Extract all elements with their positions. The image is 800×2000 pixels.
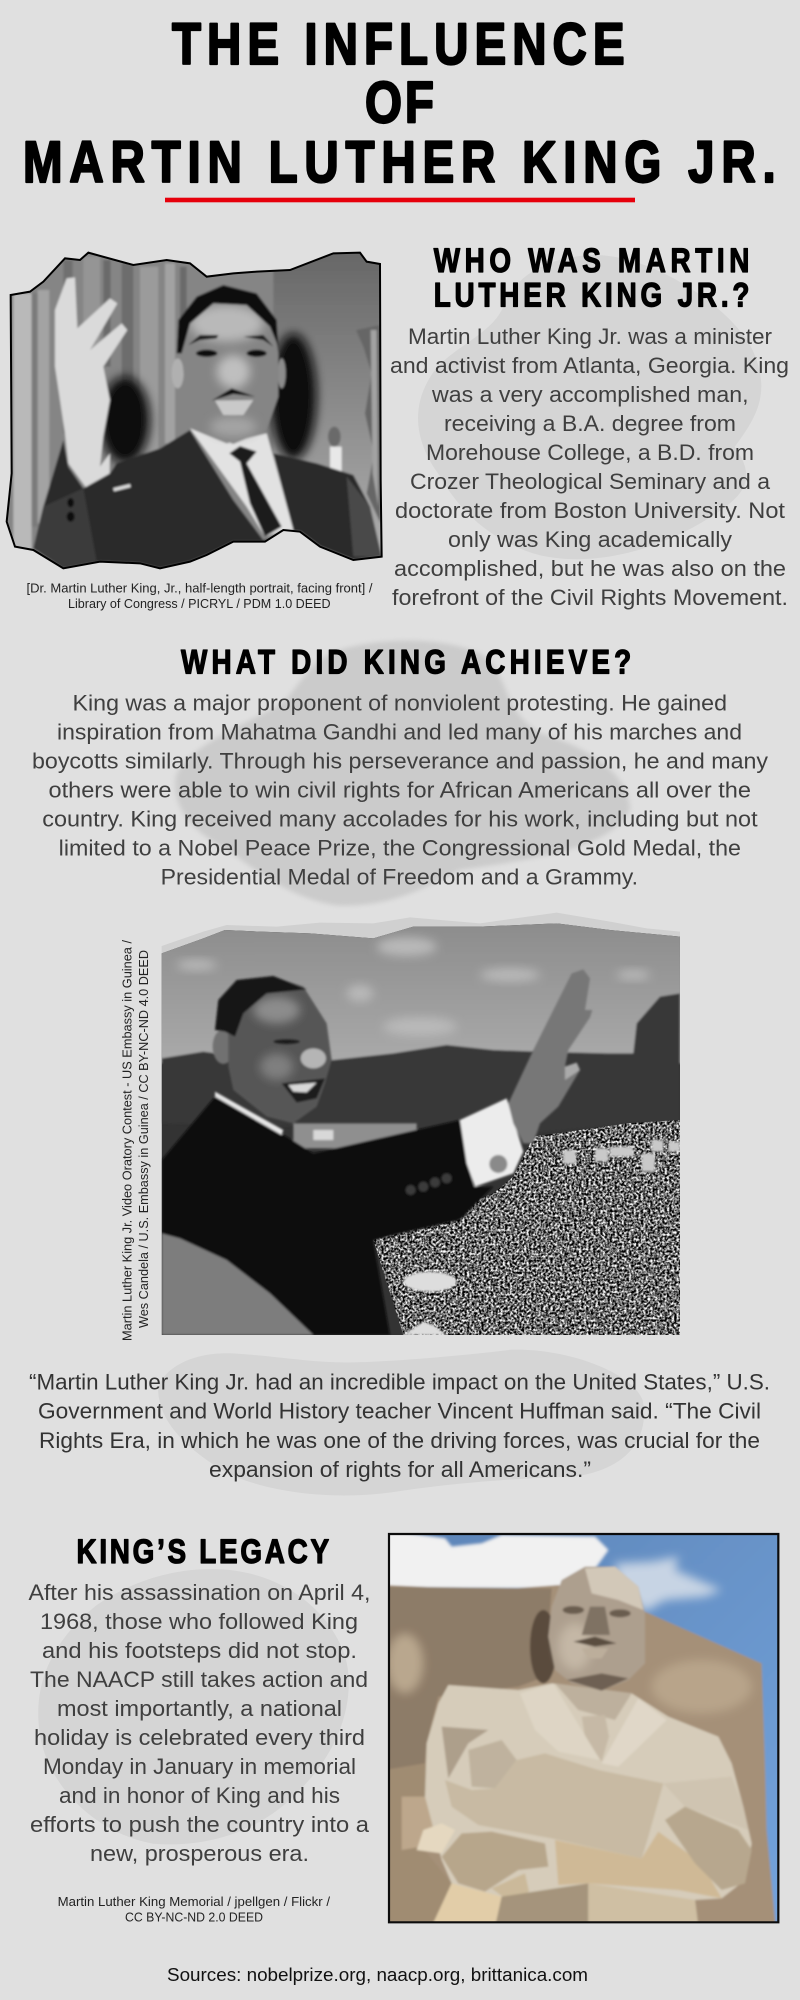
sleeve buttons [406, 1173, 452, 1195]
scroll [417, 1823, 455, 1853]
text block: who was: only was King academically [448, 527, 732, 552]
photo border [389, 1534, 778, 1922]
text block: who was: doctorate from Boston University. Not [395, 498, 785, 523]
foreground hat [162, 1233, 313, 1335]
text block: legacy: 1968, those who followed King [40, 1609, 358, 1634]
lower forearm [555, 1832, 722, 1898]
text block: who was: and activist from Atlanta, Georgia. King [390, 353, 789, 378]
photo caption: portrait: Library of Congress / PICRYL / PDM 1.0 DEED [68, 596, 331, 611]
text block: who was: was a very accomplished man, [431, 382, 748, 407]
cuff [460, 1098, 523, 1187]
text block: who was: forefront of the Civil Rights Movement. [392, 585, 788, 610]
text block: achievements: country. King received many accolades for his work, including but not [42, 807, 758, 832]
moustache and mouth [212, 388, 255, 401]
heading: what did King achieve: WHAT DID KING ACHIEVE? [181, 643, 631, 681]
brows and eyes [188, 335, 218, 345]
candle [330, 447, 342, 473]
distant signs [293, 1123, 417, 1148]
crossed forearm [445, 1753, 663, 1858]
suit [162, 1097, 493, 1335]
statue body [425, 1683, 752, 1927]
wall [273, 247, 383, 563]
raised hand [55, 277, 127, 488]
text block: legacy: holiday is celebrated every third [34, 1725, 365, 1750]
bedpost [356, 325, 381, 523]
far sleeve [663, 1777, 748, 1830]
text block: legacy: efforts to push the country into a [30, 1812, 370, 1837]
blob: behind who-was section [418, 255, 761, 559]
quote from Vincent Huffman: “Martin Luther King Jr. had an incredible impact on the United States,” U.S. [29, 1369, 770, 1394]
text block: who was [390, 324, 789, 610]
shirt cuff at bottom [403, 1322, 447, 1335]
text block: achievements: Presidential Medal of Freedom and a Grammy. [161, 865, 638, 890]
suit [33, 430, 382, 568]
tie [229, 446, 282, 537]
ear [212, 1031, 230, 1065]
crowd [373, 1120, 680, 1335]
text block: legacy: After his assassination on April 4, [28, 1580, 370, 1605]
text block: achievements: limited to a Nobel Peace Prize, the Congressional Gold Medal, the [59, 836, 741, 861]
text block: achievements: King was a major proponent of nonviolent protesting. He gained [72, 691, 727, 716]
shadow beside head [530, 1610, 557, 1683]
title: OF [365, 71, 434, 136]
text block: legacy: new, prosperous era. [90, 1841, 309, 1866]
photo caption: vertical: Wes Candela / U.S. Embassy in Guinea / CC BY-NC-ND 4.0 DEED [136, 950, 151, 1328]
text block: who was: Martin Luther King Jr. was a minister [408, 324, 772, 349]
title [23, 13, 776, 195]
ears [172, 358, 184, 388]
text block: achievements: boycotts similarly. Through his perseverance and passion, he and many [32, 749, 768, 774]
blob: behind legacy section [38, 1569, 349, 1844]
photo caption: memorial [58, 1894, 330, 1925]
heading: who was: WHO WAS MARTIN [434, 241, 749, 280]
curtain [0, 247, 277, 573]
quote from Vincent Huffman: Rights Era, in which he was one of the driving forces, was crucial for the [39, 1428, 760, 1453]
photo: King memorial statue [385, 1530, 783, 1927]
eyes, nose, mouth [563, 1606, 584, 1614]
photo: King portrait with torn edge [0, 247, 383, 573]
text block: achievements [32, 691, 768, 890]
tie [582, 1715, 609, 1762]
text block: achievements: others were able to win civil rights for African Americans all over the [48, 778, 751, 803]
text block: legacy [28, 1580, 370, 1866]
blob: behind quote [158, 1350, 644, 1495]
text block: legacy: Monday in January in memorial [43, 1754, 356, 1779]
left hand [442, 1832, 548, 1892]
photo: King waving at the march [160, 913, 682, 1337]
text block: who was: Morehouse College, a B.D. from [426, 440, 754, 465]
hair [215, 976, 307, 1037]
title: THE INFLUENCE [172, 13, 625, 77]
placards and umbrella [563, 1140, 680, 1172]
head [548, 1567, 645, 1691]
photo caption: portrait: [Dr. Martin Luther King, Jr., half-length portrait, facing front] / [26, 580, 373, 595]
photo caption: memorial: Martin Luther King Memorial / jpellgen / Flickr / [58, 1894, 330, 1909]
right hand [665, 1807, 752, 1890]
photo caption: vertical [120, 940, 151, 1341]
text block: legacy: and in honor of King and his [59, 1783, 340, 1808]
lapels [520, 1683, 600, 1760]
photo caption: vertical: Martin Luther King Jr. Video Oratory Contest - US Embassy in Guinea / [120, 940, 135, 1341]
shirt [190, 428, 293, 537]
rock [385, 1585, 776, 1927]
quote from Vincent Huffman: expansion of rights for all Americans.” [209, 1457, 591, 1482]
text block: who was: accomplished, but he was also on the [394, 556, 786, 581]
photo caption: memorial: CC BY-NC-ND 2.0 DEED [125, 1910, 263, 1925]
heading: who was: LUTHER KING JR.? [434, 276, 749, 314]
eye [273, 1039, 300, 1044]
smile [282, 1078, 325, 1103]
title: MARTIN LUTHER KING JR. [23, 131, 776, 195]
text block: who was: receiving a B.A. degree from [444, 411, 736, 436]
upper sleeve shading [442, 1727, 488, 1778]
shirt and collar [555, 1683, 632, 1720]
text block: legacy: most importantly, a national [57, 1696, 342, 1721]
hand [508, 969, 592, 1143]
clouds [385, 1530, 608, 1588]
text block: legacy: and his footsteps did not stop. [42, 1638, 357, 1663]
torn paper edge [162, 913, 680, 955]
text block: achievements: inspiration from Mahatma Gandhi and led many of his marches and [57, 720, 742, 745]
face [230, 338, 280, 445]
quote from Vincent Huffman [29, 1369, 770, 1482]
trees [162, 992, 680, 1124]
collar [215, 1092, 283, 1135]
heading: King's legacy: KING’S LEGACY [76, 1532, 329, 1571]
head [228, 977, 332, 1123]
blob: behind achievements section [175, 641, 630, 906]
hair [177, 285, 278, 353]
text block: legacy: The NAACP still takes action and [30, 1667, 368, 1692]
heading: who was [434, 241, 749, 314]
red underline [165, 198, 635, 202]
quote from Vincent Huffman: Government and World History teacher Vincent Huffman said. “The Civil [38, 1399, 761, 1424]
photo caption: portrait [26, 580, 373, 611]
sources line: Sources: nobelprize.org, naacp.org, brittanica.com [167, 1965, 588, 1985]
shadows behind hand and head [100, 377, 150, 463]
lower torso [432, 1883, 502, 1927]
text block: who was: Crozer Theological Seminary and a [410, 469, 771, 494]
